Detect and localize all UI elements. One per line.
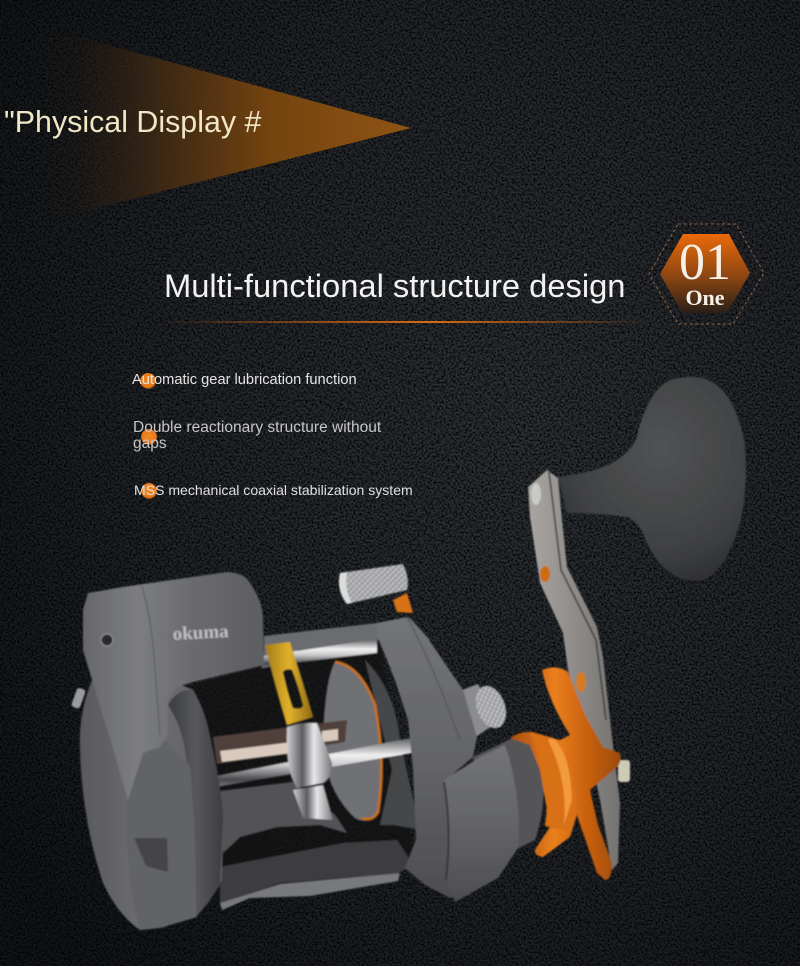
chrome front bar [212,738,412,787]
left side disc [80,680,223,930]
brand name: okuma [172,621,230,645]
spool body [213,782,347,853]
far frame interior [365,660,420,830]
line counter housing [83,572,264,800]
right side plate [377,617,477,898]
lower hub plate [444,745,519,902]
banner: orange wedge [0,20,411,228]
crank arm [528,470,630,870]
gold level wind [265,642,313,725]
subheading: structure design: Multi-functional structure design [164,267,625,304]
heading underline [160,321,650,323]
heading: Physical Display: "Physical Display # [4,105,261,139]
lower body segment [127,740,197,930]
side stud [71,687,86,709]
bullet: double reactionary structure: gaps [133,435,167,452]
bullet: double reactionary structure: Double reactionary structure without [133,419,382,436]
bullet: automatic gear lubrication: Automatic gear lubrication function [132,372,357,388]
line spring [213,720,347,764]
badge: 01 One [649,224,764,324]
hub cylinder [473,737,544,858]
knurled drag lever [339,564,413,613]
bullet: MSS stabilization: MSS mechanical coaxial stabilization system [134,482,413,498]
small knurled dial [462,682,512,738]
spool flange [323,662,381,820]
handle knob [558,377,746,581]
top frame bridge [264,618,430,665]
housing screw [101,634,113,646]
top crossbar [262,639,377,668]
bullet: double reactionary structure [133,419,382,452]
inner collar ring [168,690,223,917]
lower notch [134,838,168,872]
fishing reel illustration [71,377,746,930]
badge: 01 One: 01 [679,234,731,291]
chrome slider [287,723,333,820]
orange handle star [510,667,621,880]
frame interior shadow [190,640,415,880]
bottom frame rail [220,840,414,903]
badge: 01 One: One [685,285,725,310]
